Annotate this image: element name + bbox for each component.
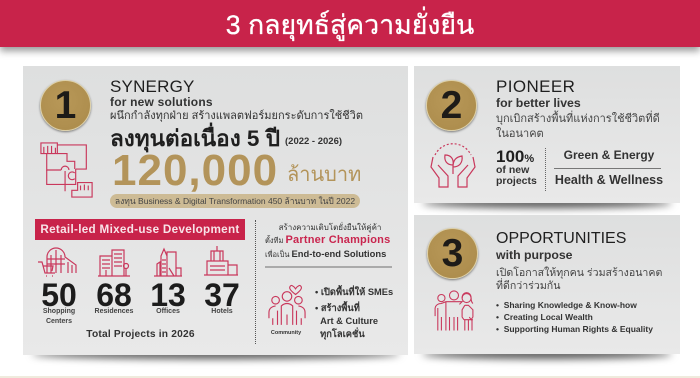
- heading: synergy: SYNERGY: [110, 77, 195, 96]
- thai partner line: สร้างความเติบโตยั่งยืนให้คู่ค้า: [279, 223, 381, 232]
- stat 68: 68: [96, 277, 132, 313]
- header banner: [0, 0, 700, 47]
- subheading: for new solutions: [110, 95, 213, 109]
- bullet list: [496, 300, 653, 334]
- stat 100% of new projects: 100%: [496, 147, 534, 166]
- panel: pioneer: [414, 66, 680, 203]
- icon: hotels: [204, 246, 238, 276]
- label shopping centers: [43, 308, 75, 325]
- label residences: Residences: [95, 308, 133, 315]
- thai description: [496, 110, 660, 140]
- end to end: เพื่อเป็น End-to-end Solutions: [265, 248, 386, 259]
- stats: project counts: [41, 277, 240, 340]
- label of new projects: of new: [496, 164, 529, 176]
- pill note: [110, 194, 360, 208]
- bullet art and culture: Art & Culture: [320, 316, 378, 326]
- thai description: [496, 266, 662, 292]
- bullet SMEs: • เปิดพื้นที่ให้ SMEs: [315, 287, 393, 297]
- label shopping centers: Shopping: [43, 308, 75, 315]
- bullet knowledge: • Sharing Knowledge & Know-how: [496, 300, 637, 310]
- label of new projects: projects: [496, 175, 537, 187]
- icon: puzzle with hands: [40, 142, 93, 198]
- icon: shopping center: [38, 247, 77, 277]
- badge 2: [426, 80, 477, 131]
- green energy: Green & Energy: [564, 148, 654, 162]
- bullet rights: • Supporting Human Rights & Equality: [496, 324, 653, 334]
- badge 3: [427, 228, 478, 279]
- partner champions: ตั้งทีม Partner Champions: [265, 234, 390, 246]
- panel: opportunities: [414, 215, 680, 354]
- icon: offices: [154, 248, 182, 277]
- retail label: Retail-led Mixed-use Development: [40, 223, 240, 236]
- health wellness: Health & Wellness: [555, 173, 663, 187]
- icon: residences: [98, 249, 130, 277]
- heading: opportunities: OPPORTUNITIES: [496, 230, 626, 247]
- badge 3: 3: [442, 232, 463, 275]
- bullet art and culture: [315, 301, 378, 340]
- label of new projects: [496, 164, 537, 187]
- thai description: บุกเบิกสร้างพื้นที่แห่งการใช้ชีวิตที่ดี: [496, 113, 660, 125]
- thai description: ในอนาคต: [496, 128, 544, 140]
- heading: pioneer: PIONEER: [496, 77, 575, 96]
- investment line: ลงทุนต่อเนื่อง 5 ปี: [110, 126, 280, 151]
- partner text: [265, 222, 390, 259]
- label community: Community: [271, 330, 301, 336]
- icon: hands holding plant: [430, 143, 476, 188]
- retail label: [35, 219, 245, 240]
- thai description: เปิดโอกาสให้ทุกคน ร่วมสร้างอนาคต: [496, 267, 662, 279]
- label shopping centers: Centers: [46, 318, 72, 325]
- thai description: ผนึกกำลังทุกฝ่าย สร้างแพลตฟอร์มยกระดับการใช้ชีวิต: [110, 110, 363, 122]
- bullet wealth: • Creating Local Wealth: [496, 312, 593, 322]
- thai description: ที่ดีกว่าร่วมกัน: [496, 280, 560, 292]
- panel: synergy: [23, 66, 408, 355]
- big number: 120,000: [112, 146, 278, 195]
- icon: community: [268, 284, 306, 325]
- stat 50: 50: [41, 277, 77, 313]
- subheading: with purpose: [496, 248, 573, 262]
- years: (2022 - 2026): [285, 136, 342, 147]
- pill note: ลงทุน Business & Digital Transformation 450 ล้านบาท ในปี 2022: [115, 196, 355, 206]
- badge 1: [40, 80, 91, 131]
- title: 3 กลยุทธ์สู่ความยั่งยืน: [226, 10, 474, 40]
- label offices: Offices: [156, 308, 180, 315]
- stat 13: 13: [150, 277, 186, 313]
- badge 2: 2: [441, 84, 462, 127]
- icon: family: [434, 290, 474, 330]
- stat 37: 37: [204, 277, 240, 313]
- label hotels: Hotels: [211, 308, 233, 315]
- total projects: Total Projects in 2026: [86, 329, 195, 340]
- bullet art and culture: • สร้างพื้นที่: [315, 303, 360, 313]
- bullet art and culture: ทุกโลเคชั่น: [320, 329, 365, 339]
- badge 1: 1: [55, 84, 76, 127]
- unit: ล้านบาท: [287, 164, 361, 186]
- community bullets: [315, 285, 393, 340]
- subheading: for better lives: [496, 96, 581, 110]
